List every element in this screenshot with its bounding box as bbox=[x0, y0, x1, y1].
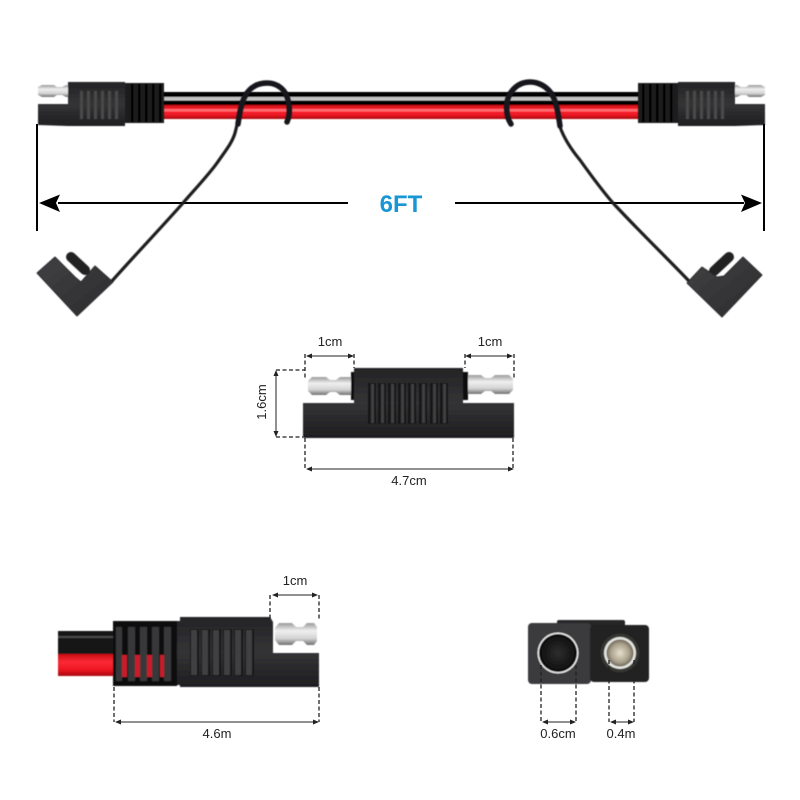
dimension: height 1.6cm bbox=[254, 370, 305, 437]
right SAE connector bbox=[638, 82, 765, 126]
dimension: right pin 1cm: 1cm bbox=[478, 334, 502, 349]
dimension: pin 0.4m: 0.4m bbox=[607, 726, 635, 741]
dimension: length 4.6m bbox=[114, 687, 319, 741]
connector face photo bbox=[528, 620, 649, 684]
dimension: pin 1cm: 1cm bbox=[283, 573, 307, 588]
dimension: right pin 1cm bbox=[465, 334, 514, 380]
side connector photo bbox=[58, 617, 319, 687]
right dust cap with tether bbox=[507, 82, 762, 317]
dimension: length 4.6m: 4.6m bbox=[203, 726, 231, 741]
panel: front view of connector bbox=[528, 620, 649, 741]
right length arrow bbox=[455, 194, 762, 212]
left SAE connector bbox=[38, 82, 164, 126]
dimension: left pin 1cm: 1cm bbox=[318, 334, 342, 349]
left length arrow bbox=[39, 194, 348, 212]
panel: connector dimensions bbox=[254, 334, 514, 488]
dimension: pin 1cm bbox=[270, 573, 319, 620]
connector pair photo bbox=[303, 368, 514, 438]
panel: side view of connector bbox=[58, 573, 319, 741]
dimension: left pin 1cm bbox=[305, 334, 354, 380]
left dust cap with tether bbox=[37, 83, 289, 316]
cable wires bbox=[160, 92, 640, 119]
panel: full cable with 6FT length bbox=[37, 82, 765, 317]
dimension: width 4.7cm: 4.7cm bbox=[391, 473, 427, 488]
length dimension: extension lines bbox=[37, 124, 764, 231]
dimension: width 4.7cm bbox=[305, 438, 514, 488]
length label: 6FT bbox=[380, 191, 423, 218]
dimension: socket 0.6cm: 0.6cm bbox=[540, 726, 576, 741]
dimension: height 1.6cm: 1.6cm bbox=[254, 384, 269, 420]
